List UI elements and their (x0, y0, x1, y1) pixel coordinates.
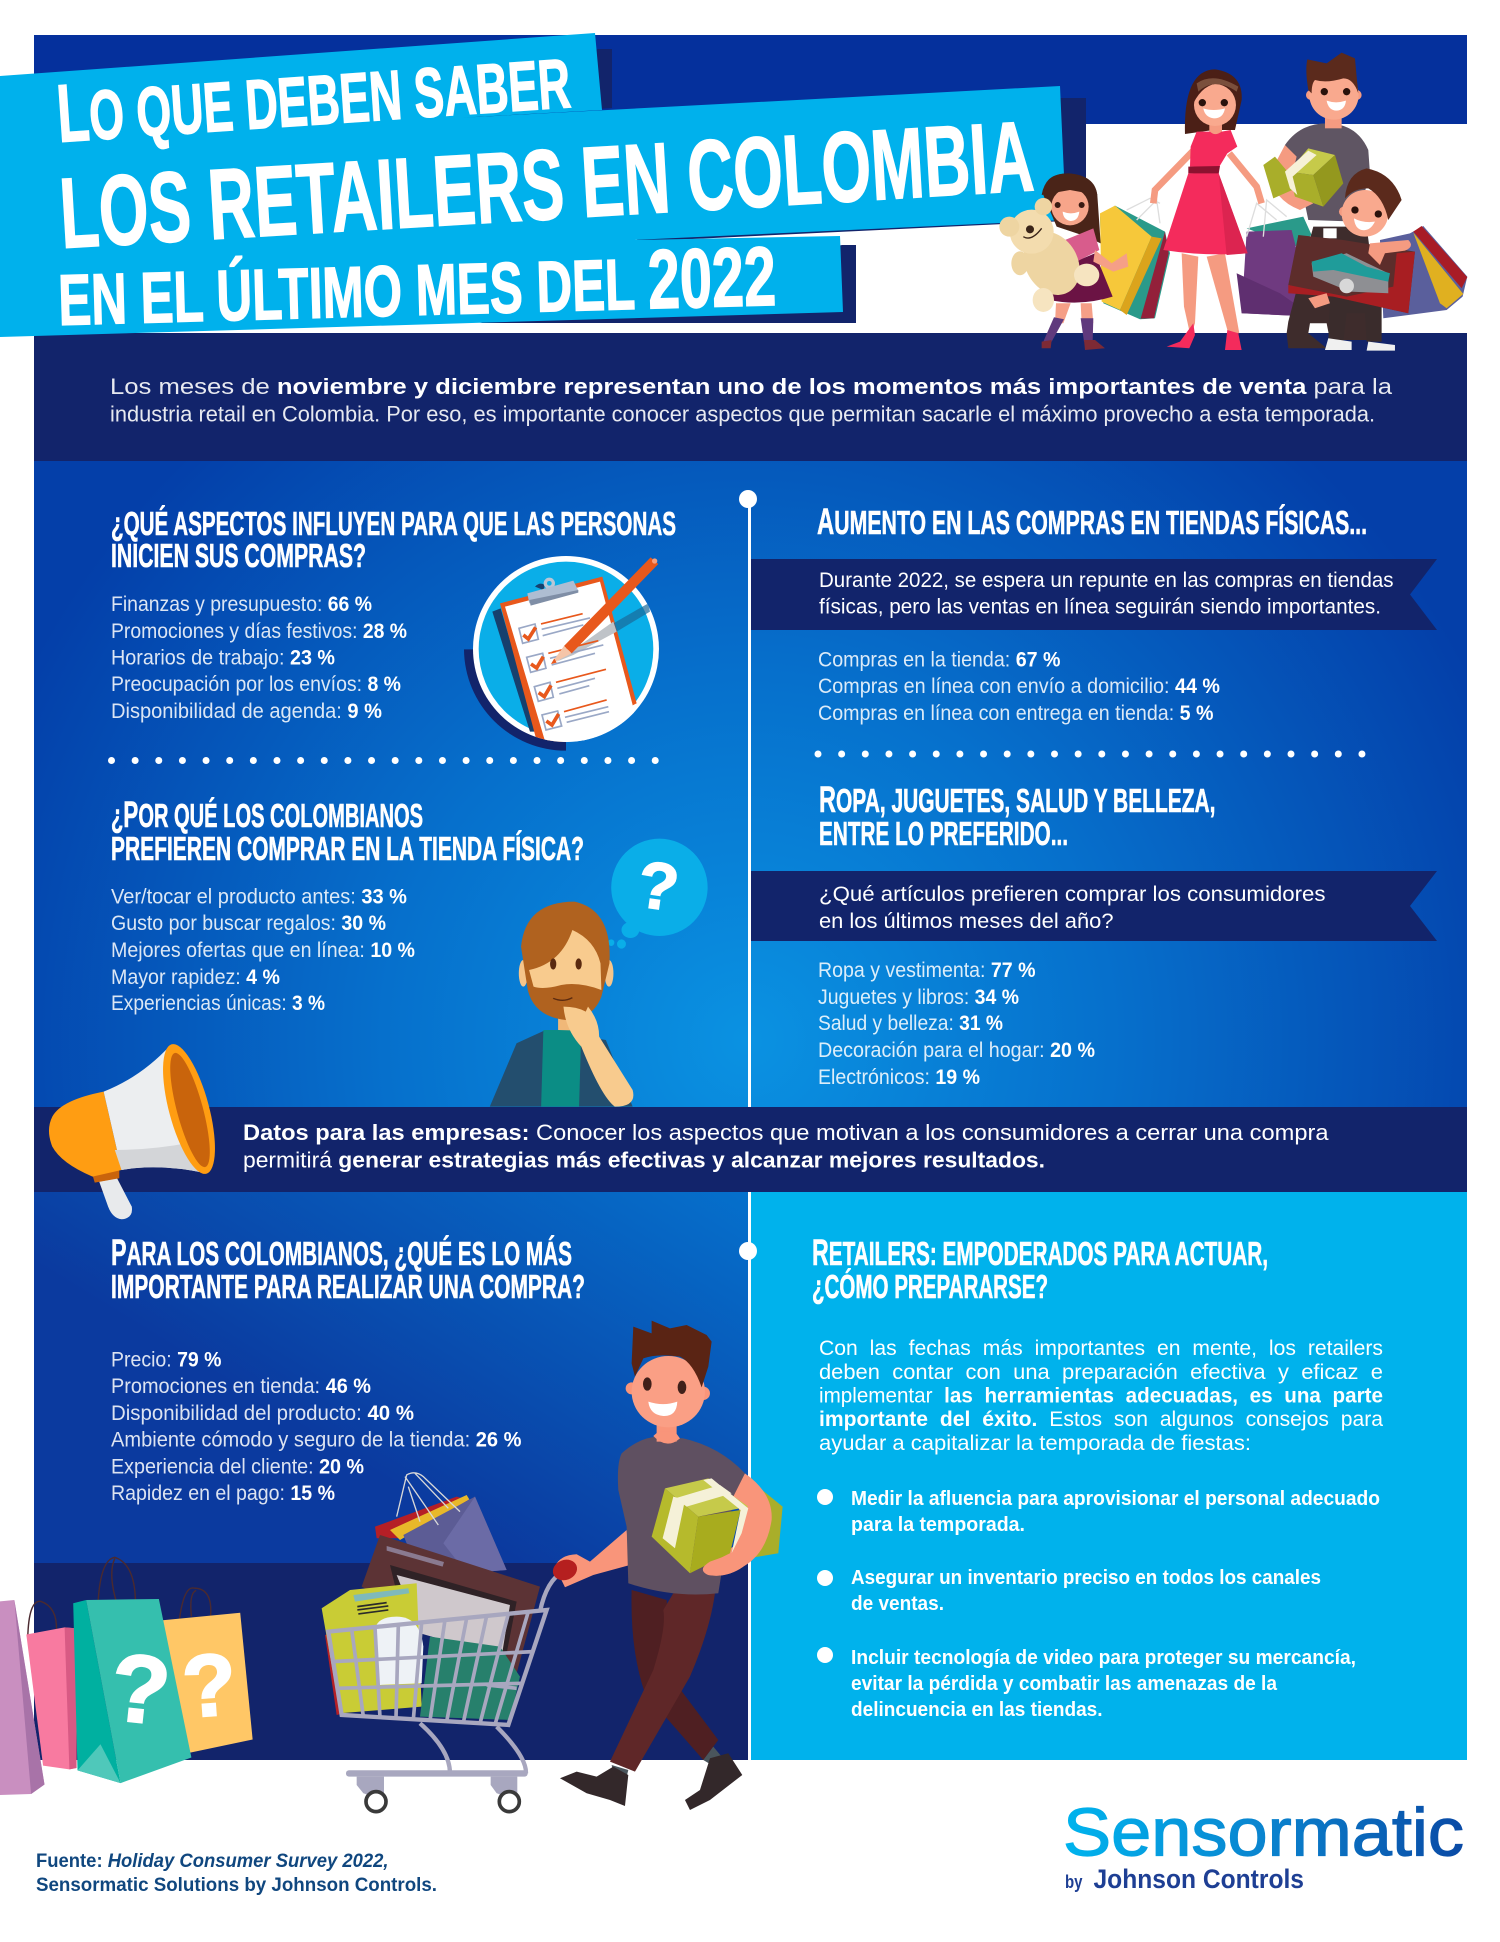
tip: medir la afluencia: para la temporada. (851, 1513, 1025, 1536)
list: razones tienda física: Ver/tocar el producto antes: 33 % (111, 884, 407, 908)
speech bubble (608, 839, 708, 949)
illustration: thinking man with speech bubble: ? (633, 846, 683, 925)
box behind arm (748, 1480, 783, 1558)
paragraph: retailers: implementar las herramientas adecuadas, es una parte (819, 1384, 1383, 1408)
heading: por qué prefieren tienda física (111, 794, 584, 867)
logo: Sensormatic by Johnson Controls: Sensormatic (1063, 1794, 1464, 1870)
tip: asegurar inventario: de ventas. (851, 1592, 944, 1615)
legs (610, 1590, 722, 1777)
list: canales de compra (818, 648, 1220, 725)
title (54, 34, 1037, 343)
sections background (34, 461, 1467, 1760)
tip: asegurar inventario: Asegurar un inventario preciso en todos los canales (851, 1566, 1321, 1589)
boy with toy car (1288, 168, 1415, 351)
hand on box (703, 1553, 743, 1576)
torso (618, 1437, 745, 1595)
intro text: industria retail en Colombia. Por eso, es importante conocer aspectos que permitan sacarle el máximo provecho a esta temporada. (110, 402, 1375, 426)
list: factores de compra: Promociones en tienda: 46 % (111, 1374, 371, 1398)
icon: clipboard and pencil (464, 556, 659, 753)
list: artículos preferidos: Salud y belleza: 31 % (818, 1011, 1003, 1035)
tip: medir la afluencia: Medir la afluencia para aprovisionar el personal adecuado (851, 1487, 1380, 1510)
paragraph: retailers: importante del éxito. Estos son algunos consejos para (819, 1408, 1383, 1431)
tip: tecnología de video: Incluir tecnología de video para proteger su mercancía, (851, 1646, 1356, 1669)
list: aspectos (111, 592, 407, 723)
heading: retailers empoderados: ¿CÓMO PREPARARSE? (812, 1268, 1048, 1305)
list: artículos preferidos (818, 958, 1095, 1089)
tip: medir la afluencia (817, 1487, 1380, 1536)
list: aspectos: Disponibilidad de agenda: 9 % (111, 699, 382, 723)
paragraph: retailers: ayudar a capitalizar la temporada de fiestas: (819, 1432, 1251, 1455)
father with gift box (1263, 53, 1382, 348)
tip: tecnología de video (817, 1646, 1356, 1721)
heading: por qué prefieren tienda física: PREFIEREN COMPRAR EN LA TIENDA FÍSICA? (111, 830, 584, 867)
title: LO QUE DEBEN SABER (54, 34, 573, 160)
list: razones tienda física: Mejores ofertas que en línea: 10 % (111, 938, 415, 962)
list: aspectos: Finanzas y presupuesto: 66 % (111, 592, 372, 616)
heading: retailers empoderados (812, 1232, 1268, 1305)
illustration: family shopping (999, 53, 1467, 351)
father's and boy's bags (1237, 200, 1467, 318)
illustration: gift bags with question marks (0, 1557, 253, 1795)
illustration: walking man with box (550, 1321, 783, 1810)
yellow bag (163, 1588, 253, 1753)
icon: megaphone (49, 1039, 226, 1219)
pink bag (26, 1601, 77, 1769)
girl's shopping bags (1100, 198, 1170, 319)
illustration: thinking man with speech bubble (490, 839, 708, 1107)
illustration: gift bags with question marks: ? (179, 1634, 240, 1736)
source note (36, 1851, 437, 1896)
list: artículos preferidos: Ropa y vestimenta: 77 % (818, 958, 1036, 982)
list: factores de compra: Experiencia del cliente: 20 % (111, 1454, 364, 1478)
list: artículos preferidos: Decoración para el hogar: 20 % (818, 1038, 1095, 1062)
source note: Sensormatic Solutions by Johnson Controls. (36, 1875, 437, 1896)
green box (420, 1637, 520, 1720)
title: EN EL ÚLTIMO MES DEL 2022 (57, 229, 777, 343)
cart base and wheels (346, 1770, 528, 1812)
list: razones tienda física: Mayor rapidez: 4 % (111, 965, 280, 989)
list: factores de compra: Ambiente cómodo y seguro de la tienda: 26 % (111, 1428, 522, 1452)
heading: ropa, juguetes (819, 779, 1216, 852)
paragraph: retailers: Con las fechas más importantes en mente, los retailers (819, 1337, 1383, 1360)
intro text (110, 374, 1393, 426)
tip: tecnología de video: delincuencia en las tiendas. (851, 1698, 1102, 1721)
heading: qué aspectos influyen (111, 505, 676, 574)
list: artículos preferidos: Juguetes y libros: 34 % (818, 985, 1019, 1009)
logo: Sensormatic by Johnson Controls: Johnson Controls (1094, 1864, 1304, 1894)
intro text: Los meses de noviembre y diciembre representan uno de los momentos más importantes de venta para la (110, 374, 1393, 399)
list: razones tienda física (111, 884, 415, 1015)
list: factores de compra (111, 1348, 522, 1505)
ribbon: durante 2022: Durante 2022, se espera un repunte en las compras en tiendas (819, 568, 1394, 592)
ribbon: durante 2022 (751, 559, 1437, 630)
heading: qué aspectos influyen: ¿QUÉ ASPECTOS INFLUYEN PARA QUE LAS PERSONAS (111, 505, 676, 542)
cart grip (550, 1556, 580, 1584)
man (490, 902, 633, 1107)
tip: asegurar inventario (817, 1566, 1321, 1615)
header background bands (34, 35, 1467, 461)
heading: por qué prefieren tienda física: ¿POR QUÉ LOS COLOMBIANOS (111, 794, 423, 835)
teal bag (73, 1557, 191, 1783)
right arm (703, 1473, 772, 1576)
ribbon: qué artículos: en los últimos meses del año? (819, 909, 1114, 933)
callout: datos para las empresas: Datos para las empresas: Conocer los aspectos que motivan a los consumidores a cerrar una compra (243, 1120, 1329, 1145)
source note: Fuente: Holiday Consumer Survey 2022, (36, 1851, 388, 1872)
shoes (560, 1753, 742, 1810)
paragraph: retailers: deben contar con una preparación efectiva y eficaz e (819, 1361, 1383, 1384)
girl with teddy bear (999, 173, 1128, 350)
dotted divider left (112, 757, 656, 764)
heading: qué es lo más importante (111, 1232, 585, 1305)
tip: tecnología de video: evitar la pérdida y combatir las amenazas de la (851, 1672, 1278, 1695)
head (626, 1321, 712, 1444)
left arm (555, 1530, 630, 1587)
list: factores de compra: Disponibilidad del producto: 40 % (111, 1401, 414, 1425)
illustration: shopping cart (322, 1473, 563, 1812)
paragraph: retailers (819, 1337, 1383, 1455)
ribbon: qué artículos: ¿Qué artículos prefieren comprar los consumidores (819, 882, 1326, 906)
heading: qué es lo más importante: PARA LOS COLOMBIANOS, ¿QUÉ ES LO MÁS (111, 1232, 572, 1273)
list: aspectos: Promociones y días festivos: 28 % (111, 619, 407, 643)
list: aspectos: Preocupación por los envíos: 8 % (111, 672, 401, 696)
purple bag (0, 1600, 45, 1795)
frame box (362, 1535, 540, 1673)
yellow box and white bag (322, 1583, 423, 1715)
title banners (0, 33, 1086, 337)
list: canales de compra: Compras en la tienda: 67 % (818, 648, 1060, 672)
heading: ropa, juguetes: ENTRE LO PREFERIDO... (819, 815, 1068, 852)
logo: Sensormatic by Johnson Controls: by (1065, 1872, 1082, 1892)
heading: qué aspectos influyen: INICIEN SUS COMPRAS? (111, 537, 366, 574)
mother (1153, 69, 1262, 350)
ribbon: durante 2022: físicas, pero las ventas en línea seguirán siendo importantes. (819, 594, 1381, 618)
callout: datos para las empresas (34, 1107, 1467, 1192)
gift box (652, 1478, 748, 1573)
list: factores de compra: Precio: 79 % (111, 1348, 222, 1372)
callout: datos para las empresas: permitirá generar estrategias más efectivas y alcanzar mejores resultados. (243, 1148, 1045, 1172)
heading: ropa, juguetes: ROPA, JUGUETES, SALUD Y BELLEZA, (819, 779, 1216, 820)
heading: qué es lo más importante: IMPORTANTE PARA REALIZAR UNA COMPRA? (111, 1268, 585, 1305)
list: canales de compra: Compras en línea con entrega en tienda: 5 % (818, 701, 1214, 725)
list: razones tienda física: Gusto por buscar regalos: 30 % (111, 911, 386, 935)
list: canales de compra: Compras en línea con envío a domicilio: 44 % (818, 674, 1220, 698)
bag in cart (375, 1473, 507, 1577)
dotted divider right (818, 750, 1363, 758)
list: aspectos: Horarios de trabajo: 23 % (111, 646, 335, 670)
illustration: gift bags with question marks: ? (106, 1633, 175, 1746)
basket grid (328, 1572, 563, 1773)
ribbon: qué artículos (751, 871, 1437, 941)
list: artículos preferidos: Electrónicos: 19 % (818, 1065, 980, 1089)
list: factores de compra: Rapidez en el pago: 15 % (111, 1481, 335, 1505)
list: razones tienda física: Experiencias únicas: 3 % (111, 991, 325, 1015)
